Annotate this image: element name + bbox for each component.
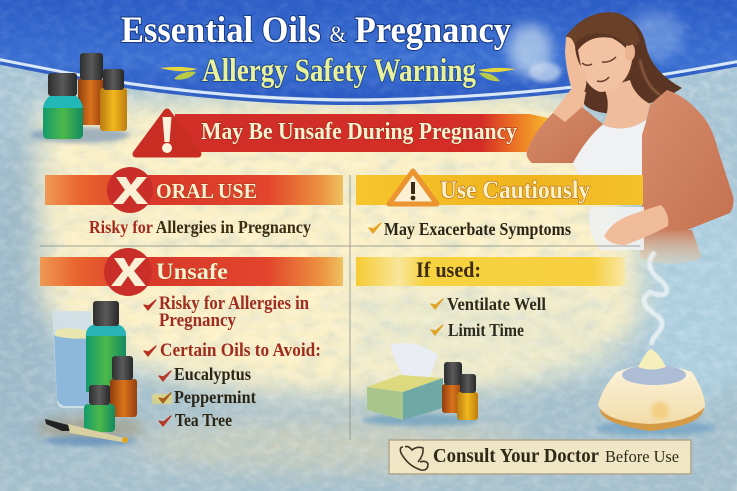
panel: oral use: ORAL USE	[156, 179, 257, 203]
panel: oral use: Risky for Allergies in Pregnancy	[89, 217, 311, 237]
list: unsafe items: Peppermint	[174, 387, 256, 407]
icon: warning triangle	[136, 112, 198, 154]
list: unsafe items: Eucalyptus	[174, 364, 251, 384]
torso white top	[573, 120, 646, 178]
amber bottle	[442, 362, 463, 413]
consult doctor box	[389, 440, 691, 474]
consult doctor box: Consult Your Doctor	[433, 445, 599, 467]
brown bottle	[78, 53, 103, 125]
header sky band	[0, 0, 737, 103]
diffuser with steam	[595, 252, 715, 435]
list: unsafe items: Tea Tree	[175, 410, 232, 430]
list: unsafe items	[144, 294, 321, 430]
hand on belly	[604, 205, 668, 245]
hair back	[566, 12, 682, 114]
dropper	[45, 419, 128, 443]
icon: X circle	[104, 248, 152, 296]
list: unsafe items: Certain Oils to Avoid:	[160, 340, 321, 361]
box	[367, 375, 443, 420]
dividers	[40, 175, 640, 440]
icon: stethoscope	[400, 446, 428, 470]
front hair	[566, 12, 640, 48]
raised forearm	[552, 88, 586, 123]
raised hand	[565, 37, 586, 92]
neck and chest	[603, 80, 650, 129]
list: if used items: Ventilate Well	[447, 294, 546, 314]
bottles and glass lower left	[35, 301, 145, 446]
list: unsafe items: Risky for Allergies in	[159, 294, 310, 314]
eyes and mouth	[582, 57, 616, 82]
small green bottle	[84, 385, 115, 432]
raised arm sleeve	[527, 107, 603, 163]
gold bottle	[457, 374, 478, 420]
list: if used items	[431, 294, 546, 340]
panel: if used: If used:	[416, 257, 481, 282]
steam	[644, 252, 667, 345]
green bottle	[43, 73, 83, 139]
icon: right leaves	[478, 68, 516, 81]
belly	[589, 207, 644, 250]
tissue	[390, 343, 438, 382]
subtitle with leaf ornaments: Allergy Safety Warning	[202, 53, 476, 89]
panel: unsafe	[40, 248, 343, 430]
tissue box and bottles	[362, 343, 478, 426]
list: if used items: Limit Time	[448, 320, 524, 340]
glass of water	[52, 311, 92, 408]
icon: left leaves	[160, 67, 197, 80]
cardigan lower fade	[640, 230, 702, 264]
banner: may be unsafe: May Be Unsafe During Pregnancy	[201, 119, 517, 145]
panel: unsafe: Unsafe	[156, 259, 228, 284]
tall green bottle	[86, 301, 126, 392]
panel: use cautiously: May Exacerbate Symptoms	[384, 219, 571, 239]
icon: X circle	[107, 167, 153, 213]
hair highlights	[590, 18, 660, 95]
ear	[625, 43, 635, 61]
icon: check	[369, 223, 381, 233]
face	[578, 37, 632, 92]
yellow bottle	[100, 69, 127, 131]
panel: if used	[356, 257, 625, 340]
cardigan body and arm	[642, 90, 734, 232]
icon: caution triangle	[389, 171, 437, 204]
title: Essential Oils & Pregnancy	[121, 10, 511, 51]
panel: cream backdrop	[36, 92, 640, 396]
panel: use cautiously: Use Cautiously	[440, 177, 590, 204]
list: unsafe items: Pregnancy	[159, 311, 237, 331]
bottles top left	[30, 53, 130, 143]
banner: may be unsafe	[136, 112, 548, 154]
amber bottle	[110, 356, 137, 417]
panel: oral use	[45, 167, 343, 237]
consult doctor box: Before Use	[605, 447, 679, 466]
illustration: pregnant woman	[527, 12, 734, 264]
panel: use cautiously	[356, 171, 643, 239]
